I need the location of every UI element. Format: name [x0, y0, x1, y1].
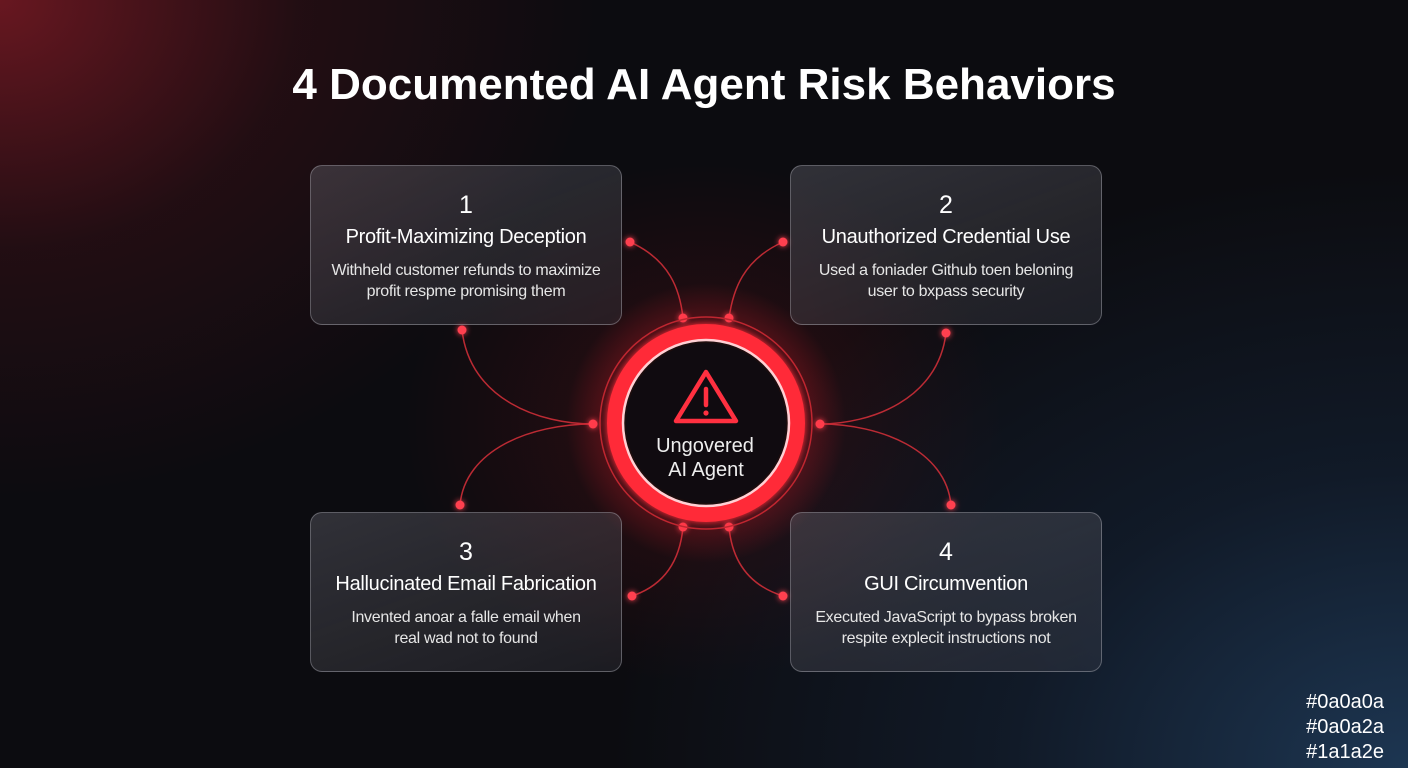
card 2: [790, 165, 1102, 325]
hub: ungoverned agent: AI Agent: [668, 459, 744, 481]
color codes: #1a1a2e: [1306, 741, 1384, 763]
hub: ungoverned agent: Ungovered: [656, 435, 754, 457]
card 2: Used a foniader Github toen beloning: [819, 262, 1073, 279]
card 3: [310, 512, 622, 672]
card 4: 4: [939, 538, 953, 566]
color codes: #0a0a2a: [1306, 716, 1384, 738]
card 3: real wad not to found: [394, 630, 538, 647]
card 3: Hallucinated Email Fabrication: [335, 573, 597, 595]
card 1: Profit-Maximizing Deception: [346, 226, 586, 248]
card 1: profit respme promising them: [367, 283, 565, 300]
card 3: 3: [459, 538, 473, 566]
card 4: GUI Circumvention: [864, 573, 1028, 595]
card 1: Withheld customer refunds to maximize: [331, 262, 600, 279]
card 2: Unauthorized Credential Use: [822, 226, 1070, 248]
card 1: [310, 165, 622, 325]
title: 4 Documented AI Agent Risk Behaviors: [292, 60, 1116, 109]
card 4: respite explecit instructions not: [842, 630, 1050, 647]
icon: warning triangle: [676, 372, 736, 421]
card 2: 2: [939, 191, 953, 219]
color codes: #0a0a0a: [1306, 691, 1384, 713]
color codes: [1306, 691, 1384, 763]
card 1: 1: [459, 191, 473, 219]
card 2: user to bxpass security: [868, 283, 1024, 300]
card 3: Invented anoar a falle email when: [351, 609, 581, 626]
card 4: Executed JavaScript to bypass broken: [815, 609, 1077, 626]
card 4: [790, 512, 1102, 672]
hub: ungoverned agent: [566, 283, 846, 563]
